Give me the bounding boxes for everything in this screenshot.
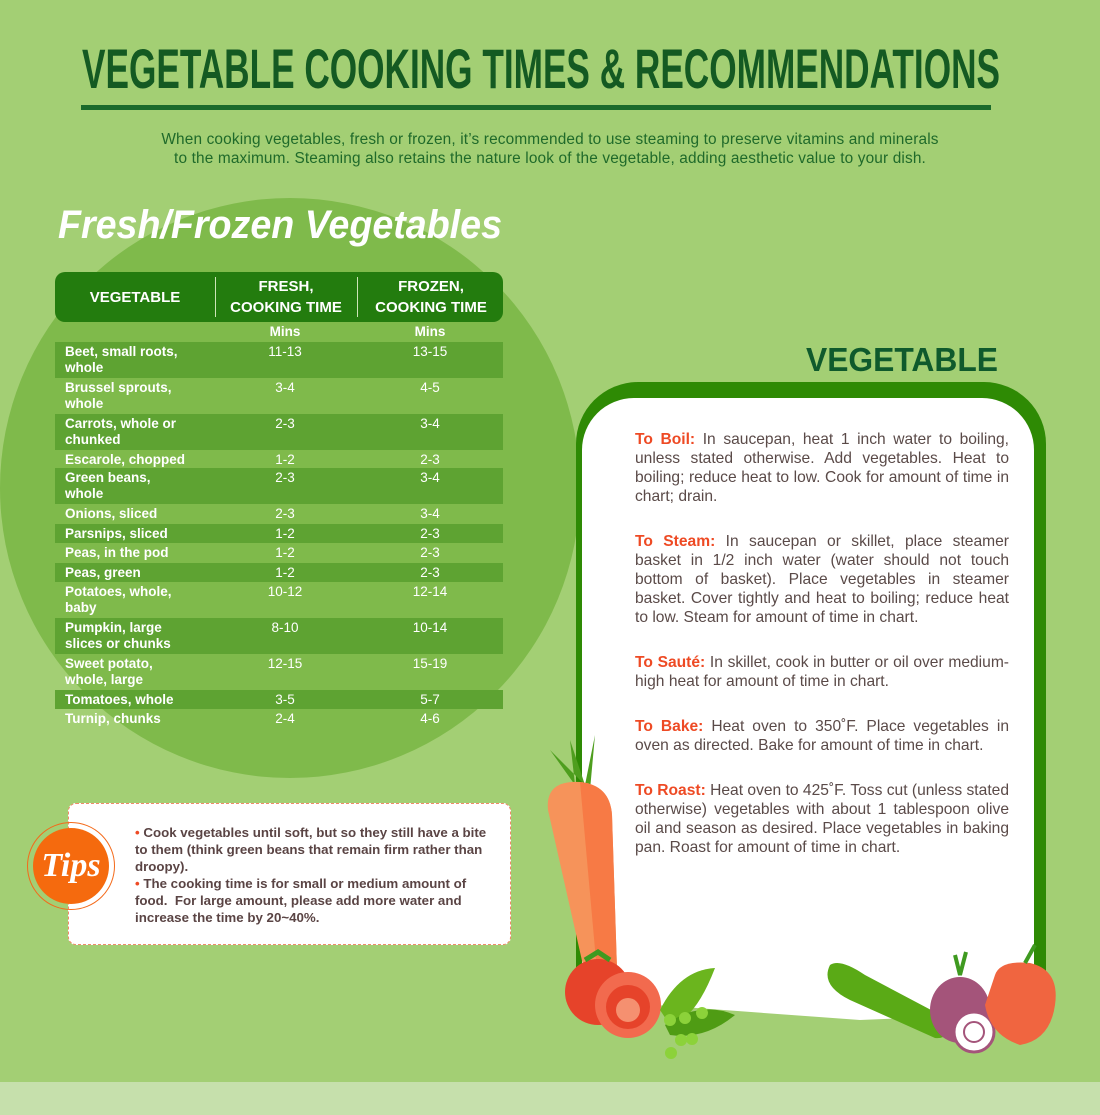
table: 2-3 xyxy=(420,565,440,580)
table header: COOKING TIME xyxy=(230,299,342,316)
table: Potatoes, whole, baby xyxy=(65,584,172,615)
table: 13-15 xyxy=(413,344,447,359)
table: 1-2 xyxy=(275,452,295,467)
table: Beet, small roots, whole xyxy=(65,344,178,375)
panel: cooking methods card xyxy=(576,382,1046,1022)
table: Parsnips, sliced xyxy=(65,526,168,541)
table: Onions, sliced xyxy=(65,506,157,521)
table header: FRESH, xyxy=(258,278,314,295)
icon: cucumber xyxy=(828,963,950,1038)
table: 8-10 xyxy=(271,620,299,635)
intro text xyxy=(161,131,939,167)
tips box xyxy=(68,803,511,945)
table: 2-3 xyxy=(420,526,440,541)
table: 12-14 xyxy=(413,584,447,599)
table: 3-4 xyxy=(420,470,440,485)
methods text: To Roast: Heat oven to 425˚F. Toss cut (unless stated otherwise) vegetables with about 1 tablespoon olive oil and season as desired. Place vegetables in baking pan. Roast for amount of time in chart. xyxy=(635,782,1009,856)
table: 11-13 xyxy=(268,344,302,359)
table: 10-12 xyxy=(268,584,302,599)
table header: VEGETABLE xyxy=(90,289,180,306)
methods text: To Bake: Heat oven to 350˚F. Place vegetables in oven as directed. Bake for amount of time in chart. xyxy=(635,718,1009,754)
methods text: To Steam: In saucepan or skillet, place steamer basket in 1/2 inch water (water should not touch bottom of basket). Place vegetables in steamer basket. Cover tightly and heat to boiling; reduce heat to low. Steam for amount of time in chart. xyxy=(635,533,1009,626)
table: 3-4 xyxy=(275,380,295,395)
background circle xyxy=(0,198,580,778)
icon: onion xyxy=(930,952,994,1052)
bottom strip xyxy=(0,1082,1100,1115)
table: 12-15 xyxy=(268,656,302,671)
table: 1-2 xyxy=(275,565,295,580)
intro text: to the maximum. Steaming also retains the nature look of the vegetable, adding aesthetic value to your dish. xyxy=(174,150,926,167)
table: Turnip, chunks xyxy=(65,711,161,726)
table: 2-4 xyxy=(275,711,295,726)
table: Mins xyxy=(415,324,445,339)
table: Green beans, whole xyxy=(65,470,151,501)
heading: vegetable: VEGETABLE xyxy=(806,341,998,378)
icon: tips badge xyxy=(27,822,115,910)
table: Tomatoes, whole xyxy=(65,692,174,707)
table: 3-4 xyxy=(420,416,440,431)
table: 4-5 xyxy=(420,380,440,395)
title underline xyxy=(81,105,991,110)
table: Peas, green xyxy=(65,565,141,580)
table: Carrots, whole or chunked xyxy=(65,416,176,447)
icon: carrot xyxy=(548,735,618,1005)
table: Pumpkin, large slices or chunks xyxy=(65,620,171,651)
icon: pea pod xyxy=(660,968,735,1059)
table: 2-3 xyxy=(275,470,295,485)
tips text xyxy=(135,825,486,925)
table: 5-7 xyxy=(420,692,440,707)
table: Mins xyxy=(270,324,300,339)
table header: COOKING TIME xyxy=(375,299,487,316)
tips text: • Cook vegetables until soft, but so they still have a bite to them (think green beans that remain firm rather than droopy). xyxy=(135,825,486,874)
ground slope under card xyxy=(576,1005,912,1028)
icon: bell pepper xyxy=(985,945,1056,1045)
table: 1-2 xyxy=(275,526,295,541)
methods text: To Sauté: In skillet, cook in butter or oil over medium-high heat for amount of time in chart. xyxy=(635,654,1009,690)
table: Escarole, chopped xyxy=(65,452,185,467)
table xyxy=(55,272,503,726)
table: 10-14 xyxy=(413,620,447,635)
section heading: fresh/frozen: Fresh/Frozen Vegetables xyxy=(58,203,502,247)
table: 1-2 xyxy=(275,545,295,560)
methods text: To Boil: In saucepan, heat 1 inch water to boiling, unless stated otherwise. Add vegetables. Heat to boiling; reduce heat to low. Cook for amount of time in chart; drain. xyxy=(635,431,1009,505)
table: 2-3 xyxy=(420,452,440,467)
methods text xyxy=(635,431,1009,856)
tips text: • The cooking time is for small or medium amount of food. For large amount, please add more water and increase the time by 20~40%. xyxy=(135,876,466,925)
illustration: vegetables xyxy=(548,735,1056,1059)
intro text: When cooking vegetables, fresh or frozen, it’s recommended to use steaming to preserve vitamins and minerals xyxy=(161,131,939,148)
table: Sweet potato, whole, large xyxy=(65,656,153,687)
icon: tips badge: Tips xyxy=(41,847,101,884)
icon: tomatoes xyxy=(565,952,661,1038)
table header: FROZEN, xyxy=(398,278,464,295)
table: 2-3 xyxy=(275,506,295,521)
table: Brussel sprouts, whole xyxy=(65,380,172,411)
table: Peas, in the pod xyxy=(65,545,169,560)
table: 3-5 xyxy=(275,692,295,707)
table: 3-4 xyxy=(420,506,440,521)
table: 2-3 xyxy=(420,545,440,560)
table: 15-19 xyxy=(413,656,447,671)
table header xyxy=(55,272,503,322)
table: 2-3 xyxy=(275,416,295,431)
table: 4-6 xyxy=(420,711,440,726)
